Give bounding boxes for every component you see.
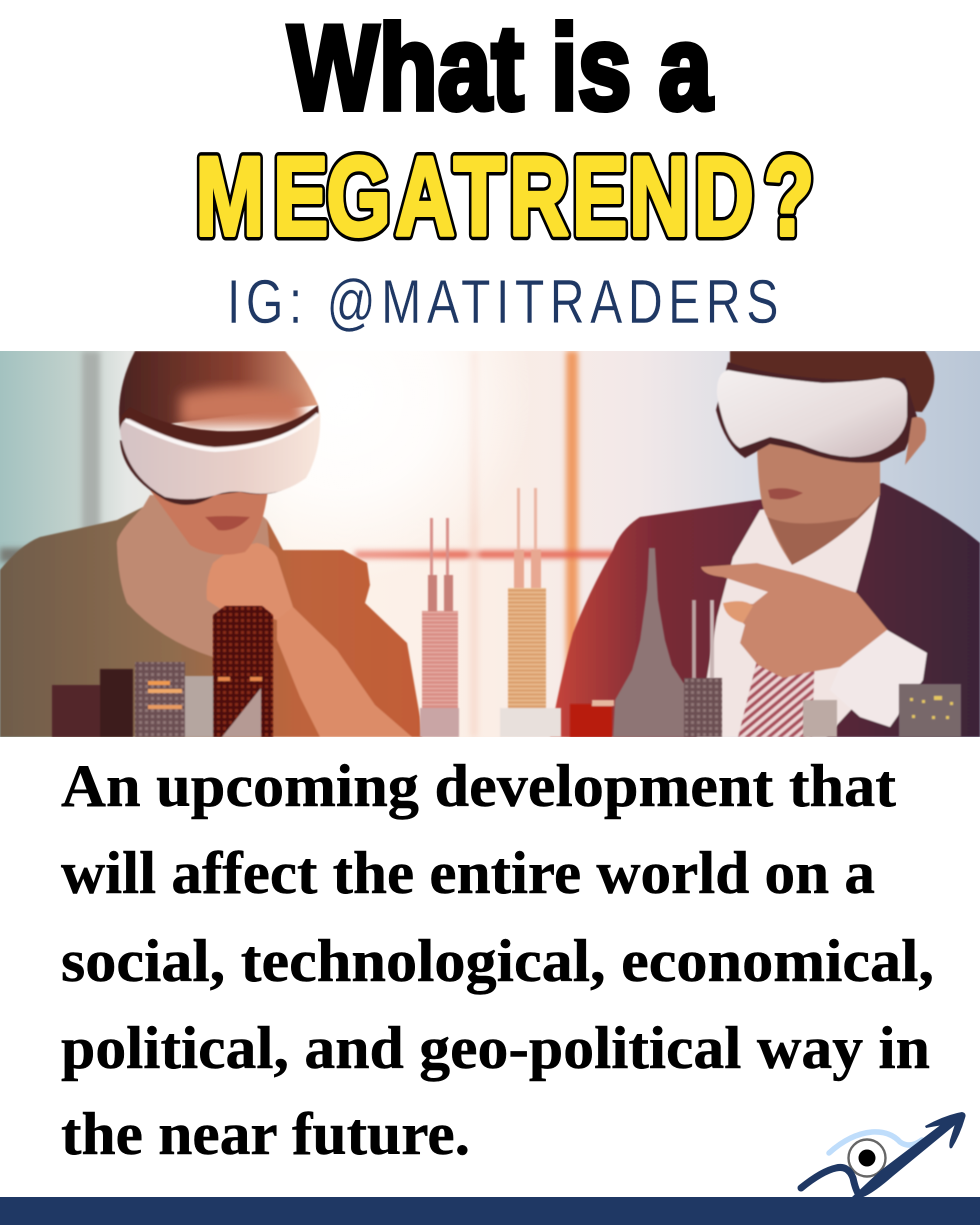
man headset strap xyxy=(716,362,918,463)
woman in headset xyxy=(0,351,422,737)
man shirt cuff xyxy=(830,630,927,727)
right glass block xyxy=(899,684,961,737)
man shirt xyxy=(697,493,880,737)
small pale block xyxy=(803,700,837,737)
woman headset strap xyxy=(122,404,320,448)
body text: megatrend definition: social, technological, economical, xyxy=(61,928,934,994)
man headset visor xyxy=(717,370,907,457)
photo background: bright window xyxy=(0,351,980,737)
orange twin-antenna tower xyxy=(500,488,561,737)
photo: two people in VR headsets with model city xyxy=(0,205,980,737)
man ear xyxy=(905,417,926,465)
body text: megatrend definition xyxy=(61,753,934,1167)
handle: IG @MATITRADERS: IG: @MATITRADERS xyxy=(227,267,778,336)
grey office block xyxy=(135,662,185,737)
woman headset visor xyxy=(120,412,320,499)
salmon twin-antenna tower xyxy=(420,518,459,737)
woman lower face xyxy=(150,490,268,555)
icon: eye and rising arrow logo xyxy=(801,1112,966,1198)
title: MEGATREND? highlighted word: MEGATREND? xyxy=(195,134,814,259)
dark red tower xyxy=(213,606,273,737)
red block xyxy=(570,704,612,737)
woman hand on chin xyxy=(207,543,293,620)
model city buildings xyxy=(52,488,961,737)
body text: megatrend definition: the near future. xyxy=(61,1101,470,1167)
body text: megatrend definition: political, and geo-political way in xyxy=(61,1015,930,1081)
woman shirt xyxy=(0,507,422,737)
woman arm xyxy=(277,600,412,737)
woman neck and chest xyxy=(117,495,270,657)
woman hair xyxy=(119,351,318,430)
man suit xyxy=(550,483,980,737)
logo eyebrow xyxy=(829,1132,922,1153)
grey antenna building xyxy=(684,600,722,737)
light block xyxy=(185,676,215,737)
man hair xyxy=(730,351,934,412)
man hand pointing xyxy=(701,563,890,680)
footer bar xyxy=(0,1197,980,1225)
title: MEGATREND? highlighted word: MEGATREND? xyxy=(195,134,814,259)
man face and neck xyxy=(757,430,880,565)
body text: megatrend definition: will affect the entire world on a xyxy=(61,840,875,906)
body text: megatrend definition: An upcoming development that xyxy=(61,753,896,819)
spire building xyxy=(613,548,690,737)
logo eye xyxy=(848,1140,886,1176)
left dark block xyxy=(52,684,101,737)
man tie xyxy=(737,662,816,737)
woman headset rim xyxy=(119,439,280,506)
logo arrow xyxy=(801,1167,860,1196)
man in headset xyxy=(550,351,980,737)
title: What is a: What is a xyxy=(288,2,713,136)
